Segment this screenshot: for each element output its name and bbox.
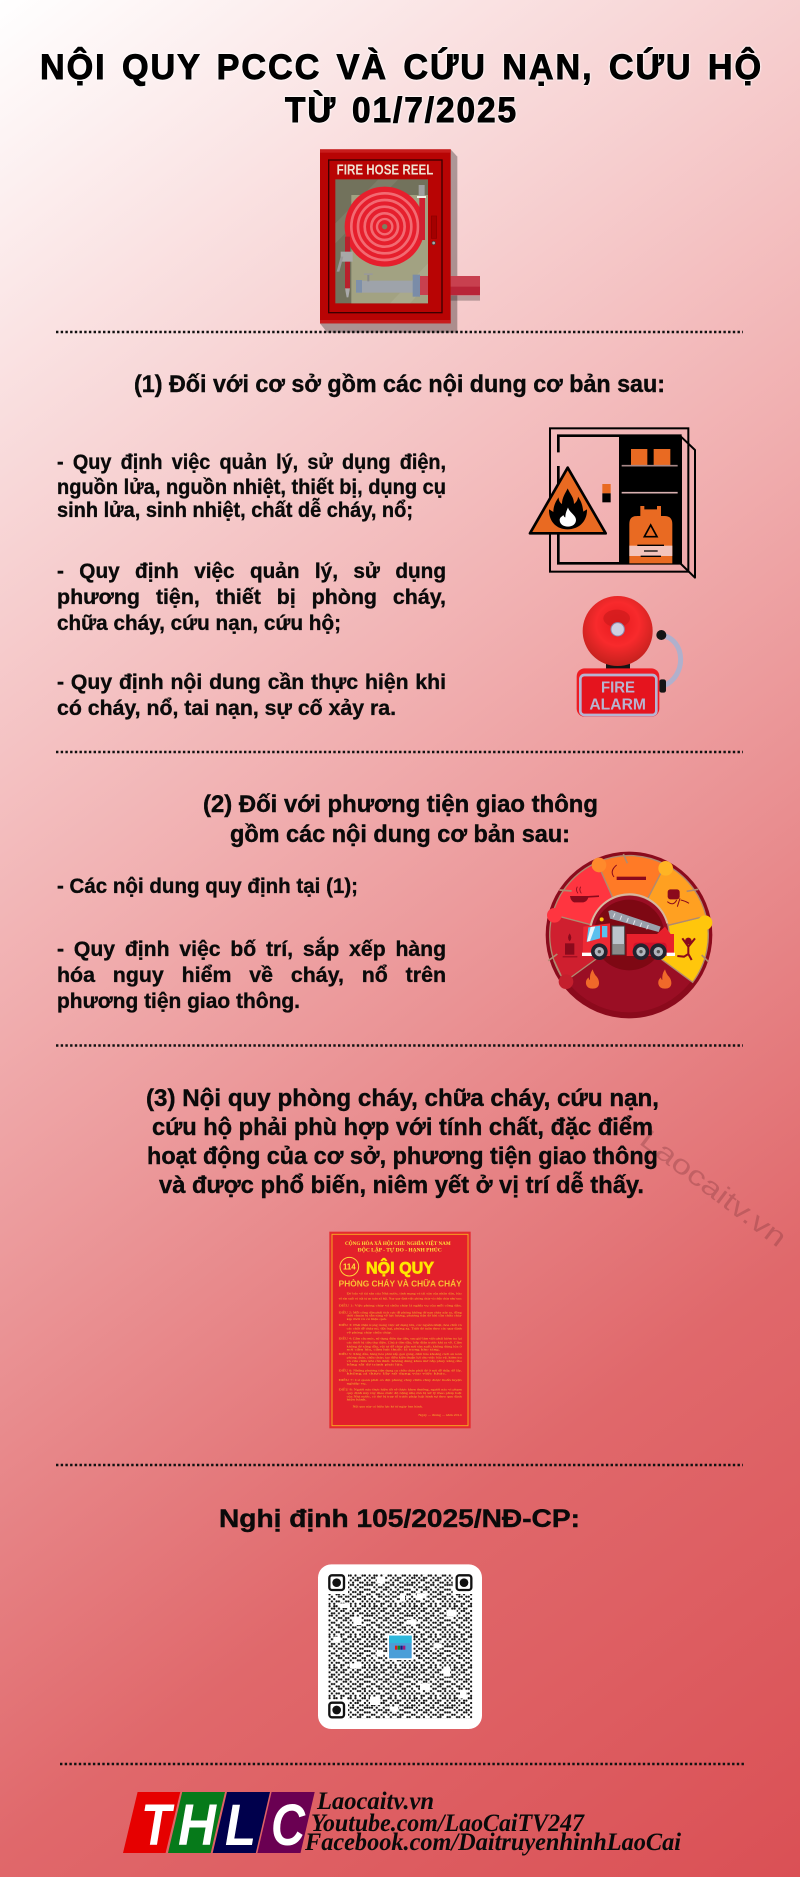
icon: fire regulations notice board: bằng sắt để tránh phát lửa. <box>347 1361 404 1366</box>
text block: section 3: (3) Nội quy phòng cháy, chữa cháy, cứu nạn, <box>146 1085 659 1112</box>
icon: fire regulations notice board: quy định này tùy theo mức độ nặng nhẹ mà bị xử lý theo pháp luật <box>347 1391 462 1395</box>
text block: section 2 rules: - Các nội dung quy định tại (1); <box>57 874 358 898</box>
text block: section 1 rules: chữa cháy, cứu nạn, cứu hộ; <box>57 611 341 635</box>
text block: section 2 rules: - Quy định việc bố trí, sắp xếp hàng <box>57 936 446 961</box>
icon: fire regulations notice board: ĐIỀU 6: Những phương tiện dụng cụ chữa cháy phải để ở nơi dễ thấy, dễ lấy, <box>339 1367 462 1373</box>
title: NỘI QUY PCCC VÀ CỨU NẠN, CỨU HỘ <box>40 47 763 87</box>
icon: fire regulations notice board: ĐIỀU 8: Người nào thực hiện tốt sẽ được khen thưởng, người nào vi phạm <box>339 1387 462 1393</box>
text block: channel links: Youtube.com/LaoCaiTV247 <box>311 1810 585 1837</box>
heading: section 2 <box>203 791 598 848</box>
divider <box>60 1763 746 1765</box>
icon: fire regulations notice board <box>329 1232 471 1428</box>
icon: fire regulations notice board: ĐIỀU 5: Xăng dầu, hàng hóa phải xếp gọn gàng, đảm bảo khoảng cách an toàn <box>339 1351 462 1357</box>
icon: fire alarm bell <box>577 596 681 717</box>
icon: fire regulations notice board: các thiết bị tiêu thụ điện. Chú ý đèn dầu, bếp điện trước khi ra về. Cấm <box>347 1340 462 1345</box>
logo: THLC: H <box>178 1793 217 1858</box>
heading: section 1: (1) Đối với cơ sở gồm các nội dung cơ bản sau: <box>134 371 665 398</box>
icon: fire regulations notice board: nơi cấm lửa, cấm hút thuốc lá trong kho tàng. <box>347 1348 440 1353</box>
text block: section 1 rules: - Quy định nội dung cần thực hiện khi <box>57 670 446 694</box>
icon: fire regulations notice board: ĐỘC LẬP - TỰ DO - HẠNH PHÚC <box>358 1246 442 1254</box>
text block: channel links: Facebook.com/DaitruyenhinhLaoCai <box>304 1829 681 1856</box>
title: TỪ 01/7/2025 <box>285 90 518 130</box>
divider <box>56 331 743 333</box>
text block: section 1 rules: nguồn lửa, nguồn nhiệt, thiết bị, dụng cụ <box>57 475 446 499</box>
divider <box>56 1044 743 1047</box>
icon: fire regulations notice board: ĐIỀU 1: Việc phòng cháy và chữa cháy là nghĩa vụ của mỗi công dân. <box>339 1303 462 1308</box>
text block: section 3: và được phổ biến, niêm yết ở vị trí dễ thấy. <box>159 1171 644 1199</box>
divider <box>56 751 743 753</box>
icon: fire regulations notice board: phòng cháy, chữa cháy; tạo điều kiện thuận lợi cho việc bảo vệ, kiểm tra <box>347 1355 462 1361</box>
icon: fire regulations notice board: thời chuẩn bị sẵn sàng về lực lượng, phương tiện để khi cần chữa cháy <box>347 1313 462 1319</box>
icon: fire regulations notice board: CỘNG HÒA XÃ HỘI CHỦ NGHĨA VIỆT NAM <box>345 1239 451 1247</box>
text block: section 3 <box>146 1085 659 1199</box>
icon: fire regulations notice board: và cứu chữa khi cần thiết. Không dùng khóa mở nắp phuy xăng dầu <box>347 1358 462 1363</box>
divider <box>56 1464 743 1466</box>
icon: fire regulations notice board: của Nhà nước, có thể bị truy tố trước pháp luật hình sự theo quy định <box>347 1393 462 1399</box>
icon: fire regulations notice board: về phòng cháy chữa cháy. <box>347 1330 392 1334</box>
text block: section 2 rules <box>57 874 446 1013</box>
icon: fire regulations notice board: ĐIỀU 2: Mỗi công dân phải tích cực đề phòng không để nạn cháy xảy ra, đồng <box>339 1309 462 1315</box>
icon: fire regulations notice board: Nội quy này có hiệu lực kể từ ngày ban hành. <box>353 1403 423 1408</box>
icon: fire safety wheel with fire truck <box>546 852 712 1018</box>
text block: channel links <box>304 1788 681 1856</box>
icon: fire regulations notice board: 114 <box>343 1263 356 1272</box>
heading: section 2: gồm các nội dung cơ bản sau: <box>230 821 570 848</box>
title <box>40 47 763 130</box>
icon: fire hose reel cabinet: FIRE HOSE REEL <box>337 162 434 178</box>
icon: fire regulations notice board: kịp thời và có hiệu quả. <box>347 1317 387 1321</box>
logo: THLC <box>123 1792 315 1858</box>
icon: fire regulations notice board: Ngày ... tháng ... năm 2014 <box>418 1413 462 1417</box>
icon: fire regulations notice board: vệ sản xuất và trật tự an toàn xã hội. Nay quy định việc phòng cháy và chữa cháy như sau: <box>339 1296 462 1300</box>
text block: section 1 rules: - Quy định việc quản lý, sử dụng <box>57 559 446 583</box>
icon: fire alarm bell: ALARM <box>589 696 646 713</box>
text block: section 2 rules: phương tiện giao thông. <box>57 989 300 1013</box>
icon: fire hose reel cabinet <box>320 149 480 333</box>
icon: fire regulations notice board: không ai được lấy sử dụng vào việc khác. <box>347 1372 447 1376</box>
logo: THLC: C <box>271 1793 306 1858</box>
icon: fire regulations notice board: ĐIỀU 4: Cấm câu móc, sử dụng điện tùy tiện, sau giờ làm việc phải kiểm tra lại <box>339 1335 462 1341</box>
text block: section 3: cứu hộ phải phù hợp với tính chất, đặc điểm <box>152 1114 653 1141</box>
text block: section 1 rules: phương tiện, thiết bị phòng cháy, <box>57 585 446 609</box>
text block: channel links: Laocaitv.vn <box>316 1788 434 1815</box>
QR code <box>318 1564 482 1729</box>
icon: fire regulations notice board: nghiệp vụ. <box>347 1381 367 1385</box>
heading: decree: Nghị định 105/2025/NĐ-CP: <box>219 1505 580 1533</box>
icon: fire regulations notice board: các chất dễ cháy nổ, độc hại, phóng xạ. Triệt để tuân theo các quy định <box>347 1325 462 1331</box>
icon: fire regulations notice board: hiện hành. <box>347 1398 367 1402</box>
text block: section 3: hoạt động của cơ sở, phương tiện giao thông <box>147 1143 658 1170</box>
text block: section 1 rules: sinh lửa, sinh nhiệt, chất dễ cháy, nổ; <box>57 497 413 522</box>
icon: fire alarm bell: FIRE <box>601 680 635 697</box>
text block: section 1 rules <box>57 450 446 720</box>
icon: fire regulations notice board: không để xăng dầu, vật tư dễ cháy gần nơi sản xuất; không dùng lửa ở <box>347 1343 462 1349</box>
text block: section 1 rules: - Quy định việc quản lý, sử dụng điện, <box>57 450 446 474</box>
icon: fire regulations notice board: ĐIỀU 7: Cơ quan phải có đội phòng cháy chữa cháy được huấn luyện <box>339 1377 462 1382</box>
logo: THLC: L <box>225 1793 256 1858</box>
watermark: Laocaitv.vn <box>634 1124 792 1253</box>
icon: fire regulations notice board: PHÒNG CHÁY VÀ CHỮA CHÁY <box>339 1280 462 1289</box>
logo: THLC: T <box>141 1793 175 1858</box>
text block: section 1 rules: có cháy, nổ, tai nạn, sự cố xảy ra. <box>57 696 396 720</box>
icon: fire regulations notice board: ĐIỀU 3: Phải thận trọng trong việc sử dụng lửa, các nguồn nhiệt, hóa chất và <box>339 1322 462 1328</box>
icon: fire regulations notice board: Để bảo vệ tài sản của Nhà nước, tính mạng và tài sản của nhân dân, bảo <box>347 1291 462 1297</box>
icon: fire regulations notice board: NỘI QUY <box>366 1258 434 1277</box>
text block: section 2 rules: hóa nguy hiểm về cháy, nổ trên <box>57 963 446 987</box>
heading: section 2: (2) Đối với phương tiện giao thông <box>203 791 598 818</box>
icon: storage cabinet with flammable sign and gas tank <box>530 428 695 578</box>
